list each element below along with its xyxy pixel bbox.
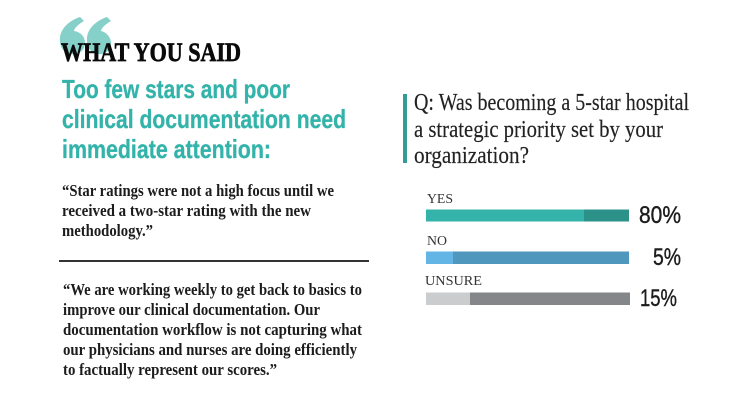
text block: first quote: “Star ratings were not a high focus until we <box>62 181 334 200</box>
text block: second quote: to factually represent our scores.” <box>63 360 277 379</box>
bar row: yes 80%: 80% <box>639 202 681 229</box>
bar row: yes 80%: YES <box>427 192 453 207</box>
text block: question: a strategic priority set by your <box>414 116 663 143</box>
bar row: no 5%: NO <box>427 234 447 249</box>
accent bar: question <box>403 94 407 163</box>
bar row: unsure 15% <box>425 274 677 312</box>
text block: question <box>414 89 689 169</box>
bar row: yes 80% <box>426 192 681 229</box>
text block: second quote: “We are working weekly to get back to basics to <box>63 280 362 299</box>
text block: second quote: our physicians and nurses are doing efficiently <box>63 340 357 359</box>
bar row: unsure 15%: 15% <box>640 285 677 312</box>
heading: teal subtitle: Too few stars and poor <box>62 74 290 104</box>
heading: teal subtitle <box>62 74 346 164</box>
icon: quotation marks <box>60 17 111 54</box>
bar row: no 5% <box>426 234 681 271</box>
heading: teal subtitle: immediate attention: <box>62 134 271 164</box>
text block: second quote <box>63 280 362 379</box>
text block: question: Q: Was becoming a 5-star hospital <box>414 89 689 116</box>
text block: second quote: improve our clinical documentation. Our <box>63 300 320 319</box>
text block: question: organization? <box>414 142 529 169</box>
bar row: unsure 15%: UNSURE <box>425 274 482 289</box>
bar row: no 5%: 5% <box>653 244 681 271</box>
text block: first quote: received a two-star rating with the new <box>62 201 312 220</box>
text block: first quote: methodology.” <box>62 221 153 240</box>
text block: first quote <box>62 181 334 240</box>
heading: teal subtitle: clinical documentation need <box>62 104 346 134</box>
text block: second quote: documentation workflow is not capturing what <box>63 320 362 339</box>
bar chart: survey results <box>425 192 681 312</box>
title: WHAT YOU SAID <box>61 38 241 67</box>
